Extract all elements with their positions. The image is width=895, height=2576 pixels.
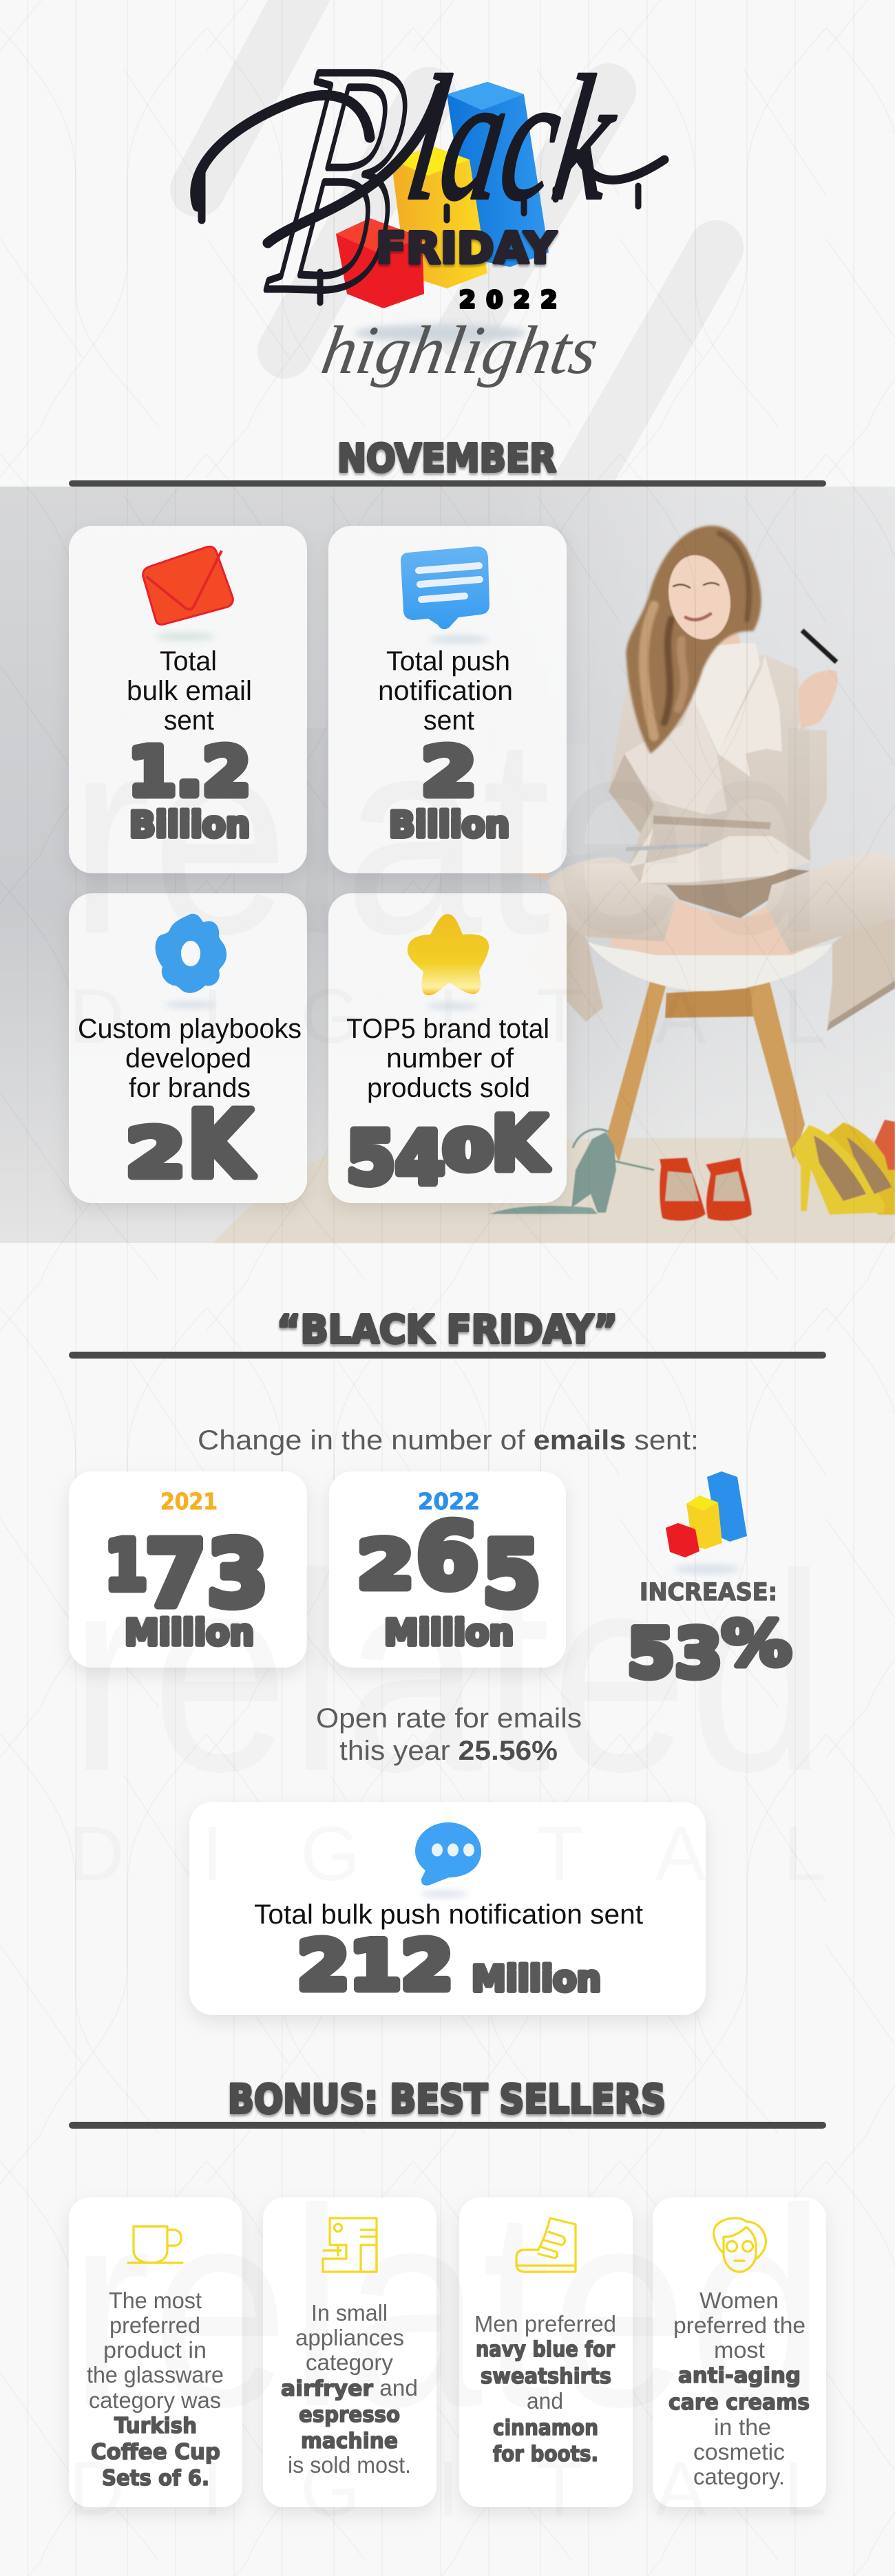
heading: Black Friday: “BLACK FRIDAY”	[277, 1308, 618, 1352]
sweater	[693, 641, 760, 754]
label: Total	[160, 646, 217, 677]
label: TOP5 brand total	[346, 1014, 549, 1044]
card: push notification	[378, 546, 513, 846]
logo bar: red	[336, 218, 424, 308]
text: product in	[103, 2337, 207, 2363]
heading: November	[69, 436, 826, 487]
card: bulk push: Total bulk push notification sent	[254, 1899, 643, 1930]
card: custom playbooks	[78, 914, 302, 1198]
card: small appliances	[281, 2218, 418, 2478]
text: in the	[714, 2414, 771, 2440]
logo bar: blue	[447, 82, 549, 267]
right thigh	[766, 852, 895, 953]
text: category was	[89, 2387, 221, 2413]
label: products sold	[367, 1073, 530, 1103]
text: Sets of 6.	[102, 2466, 209, 2491]
face	[661, 549, 738, 646]
icon: message	[401, 546, 489, 643]
carpet	[213, 1138, 895, 1243]
text: most	[714, 2337, 765, 2363]
text: airfryer and	[281, 2375, 418, 2401]
icon: envelope	[143, 546, 233, 640]
value: 1.2 Billion: 1.2	[128, 733, 251, 811]
card: cosmetics women	[668, 2218, 810, 2489]
value: 212 Million: Million	[472, 1959, 601, 2000]
left thigh	[548, 857, 677, 941]
coat belt	[653, 816, 771, 829]
coat lapels	[624, 697, 727, 815]
value: 2K: K	[187, 1092, 255, 1198]
value: 540K: 54	[346, 1116, 445, 1200]
credit card strip	[802, 630, 836, 662]
card: 2022 emails: Million	[384, 1612, 514, 1654]
card: 2022 emails: 2	[357, 1526, 414, 1604]
text: navy blue for	[476, 2337, 615, 2362]
word FRIDAY: FRIDAY	[376, 223, 557, 273]
laptop	[566, 744, 708, 857]
hero background band	[0, 487, 895, 1243]
value: 2 Billion: Billion	[389, 805, 509, 846]
value: 212 Million	[297, 1927, 601, 2005]
left forearm and hand	[501, 838, 551, 880]
text: for boots.	[493, 2442, 598, 2467]
label: Total push	[386, 646, 510, 677]
script word Black: lack	[396, 39, 630, 237]
heading: Black Friday	[69, 1308, 826, 1359]
card backgrounds	[69, 2197, 826, 2507]
left sleeve shadow	[609, 754, 654, 833]
photo: woman on chair with laptop and shoes	[213, 526, 895, 1243]
card: bulk email	[127, 546, 252, 846]
card backgrounds	[69, 1471, 706, 2015]
value: 1.2 Billion: Billion	[129, 805, 250, 846]
icon: speech bubble	[415, 1822, 481, 1897]
text: The most	[109, 2288, 202, 2313]
coat body	[609, 655, 827, 885]
value: 1.2 Billion	[128, 733, 251, 846]
label	[378, 646, 513, 736]
text: is sold most.	[288, 2452, 411, 2478]
text	[87, 2288, 224, 2491]
card: 2021 emails: 2021	[160, 1488, 218, 1515]
label: developed	[125, 1043, 251, 1074]
card: 2022 emails: 6	[416, 1504, 479, 1610]
orange heel	[874, 1120, 895, 1170]
neck	[699, 623, 740, 647]
label: Custom playbooks	[78, 1014, 302, 1044]
card: glassware	[87, 2226, 224, 2491]
panel: Black Friday stats	[69, 1425, 826, 2015]
text: Women	[699, 2288, 779, 2313]
coat tails	[527, 900, 603, 1022]
icon: star	[408, 914, 489, 1009]
chair seat	[587, 941, 832, 991]
label: sent	[423, 705, 474, 736]
label: for brands	[129, 1073, 251, 1103]
text: anti-aging	[678, 2363, 801, 2388]
icon: gear	[156, 914, 227, 1008]
yellow heels	[792, 1122, 895, 1215]
text: care creams	[668, 2390, 810, 2415]
text: cinnamon	[493, 2416, 598, 2440]
green sandals	[489, 1129, 654, 1214]
open rate text: Open rate for emails	[316, 1703, 582, 1734]
value: 540K: 0	[443, 1120, 493, 1182]
watermark: related digital: DIGITAL	[69, 2446, 826, 2532]
text: appliances	[295, 2325, 404, 2350]
icon: boot	[516, 2218, 576, 2272]
label	[78, 1014, 302, 1103]
chair legs	[607, 979, 805, 1162]
red shoes	[660, 1158, 752, 1221]
text	[281, 2300, 418, 2478]
card: fashion men	[474, 2218, 616, 2467]
card: 2021 emails: 73	[145, 1522, 268, 1628]
increase block	[627, 1471, 792, 1692]
hair highlight strands	[644, 533, 749, 736]
text	[668, 2288, 810, 2489]
text: Coffee Cup	[91, 2440, 220, 2465]
facial features	[673, 583, 719, 620]
logo bar: yellow	[391, 147, 487, 288]
subtitle: Change in the number of emails sent:	[198, 1425, 699, 1456]
watermark: related digital: DIGITAL	[69, 973, 826, 1059]
card: 2022 emails: 2022	[418, 1488, 480, 1515]
script swashes and drips	[196, 88, 664, 303]
increase block: INCREASE:	[640, 1579, 777, 1606]
card: 2021 emails: Million	[125, 1612, 254, 1654]
card: 2021 emails	[105, 1488, 268, 1654]
year 2022: 2022	[459, 286, 557, 314]
word highlights: highlights	[317, 312, 604, 388]
inner trousers	[666, 862, 814, 918]
heading: Bonus best sellers	[69, 2076, 826, 2129]
hand holding card	[798, 670, 838, 730]
text: category	[306, 2350, 393, 2375]
label	[127, 646, 252, 736]
card: 2022 emails	[357, 1488, 541, 1654]
icon: coffee machine	[323, 2218, 377, 2272]
text: Turkish	[114, 2414, 197, 2438]
increase block: %	[722, 1608, 792, 1680]
value: 2 Billion: 2	[421, 733, 476, 811]
label: number of	[386, 1043, 514, 1074]
skin legs	[610, 900, 830, 955]
label	[346, 1014, 549, 1103]
logo shadow	[355, 324, 527, 342]
value: 2 Billion	[389, 733, 509, 846]
coat skirt folds	[629, 829, 811, 883]
heading: Bonus best sellers: BONUS: BEST SELLERS	[228, 2076, 666, 2122]
panel: November stat cards	[69, 526, 826, 1203]
text	[474, 2311, 616, 2467]
watermark: related digital: DIGITAL	[69, 1811, 826, 1897]
icon: bar chart	[666, 1471, 747, 1573]
card: top five brands	[346, 914, 549, 1200]
text: category.	[693, 2464, 785, 2489]
open rate text: this year 25.56%	[339, 1736, 558, 1766]
text: sweatshirts	[481, 2364, 611, 2389]
label: notification	[378, 676, 513, 706]
text: preferred the	[673, 2312, 806, 2338]
text: cosmetic	[693, 2439, 785, 2465]
value: 212 Million: 212	[297, 1927, 453, 2005]
value: 540K: K	[492, 1101, 549, 1187]
text: the glassware	[87, 2362, 224, 2387]
text: espresso	[299, 2403, 400, 2427]
open rate text	[316, 1703, 582, 1766]
text: machine	[301, 2429, 398, 2453]
icon: cup	[128, 2226, 182, 2263]
card backgrounds	[69, 526, 567, 1203]
card: bulk push	[254, 1822, 643, 2005]
text: and	[527, 2388, 563, 2414]
panel: best sellers	[69, 2150, 826, 2532]
label: sent	[164, 705, 214, 736]
increase block: 53	[627, 1615, 722, 1692]
text: preferred	[109, 2312, 200, 2338]
script word Black: B	[253, 0, 428, 361]
card: 2022 emails: 5	[482, 1522, 541, 1628]
logo	[196, 0, 664, 388]
value: 2K: 2	[126, 1114, 185, 1192]
icon: face mask	[714, 2218, 766, 2272]
heading: November: NOVEMBER	[337, 436, 556, 481]
label: bulk email	[127, 676, 252, 706]
background diagonal stripes	[198, 0, 716, 496]
white heels	[389, 1125, 568, 1201]
card: 2021 emails: 1	[105, 1525, 147, 1606]
text: Men preferred	[474, 2311, 616, 2337]
hair back	[626, 526, 761, 754]
text: In small	[311, 2300, 388, 2325]
